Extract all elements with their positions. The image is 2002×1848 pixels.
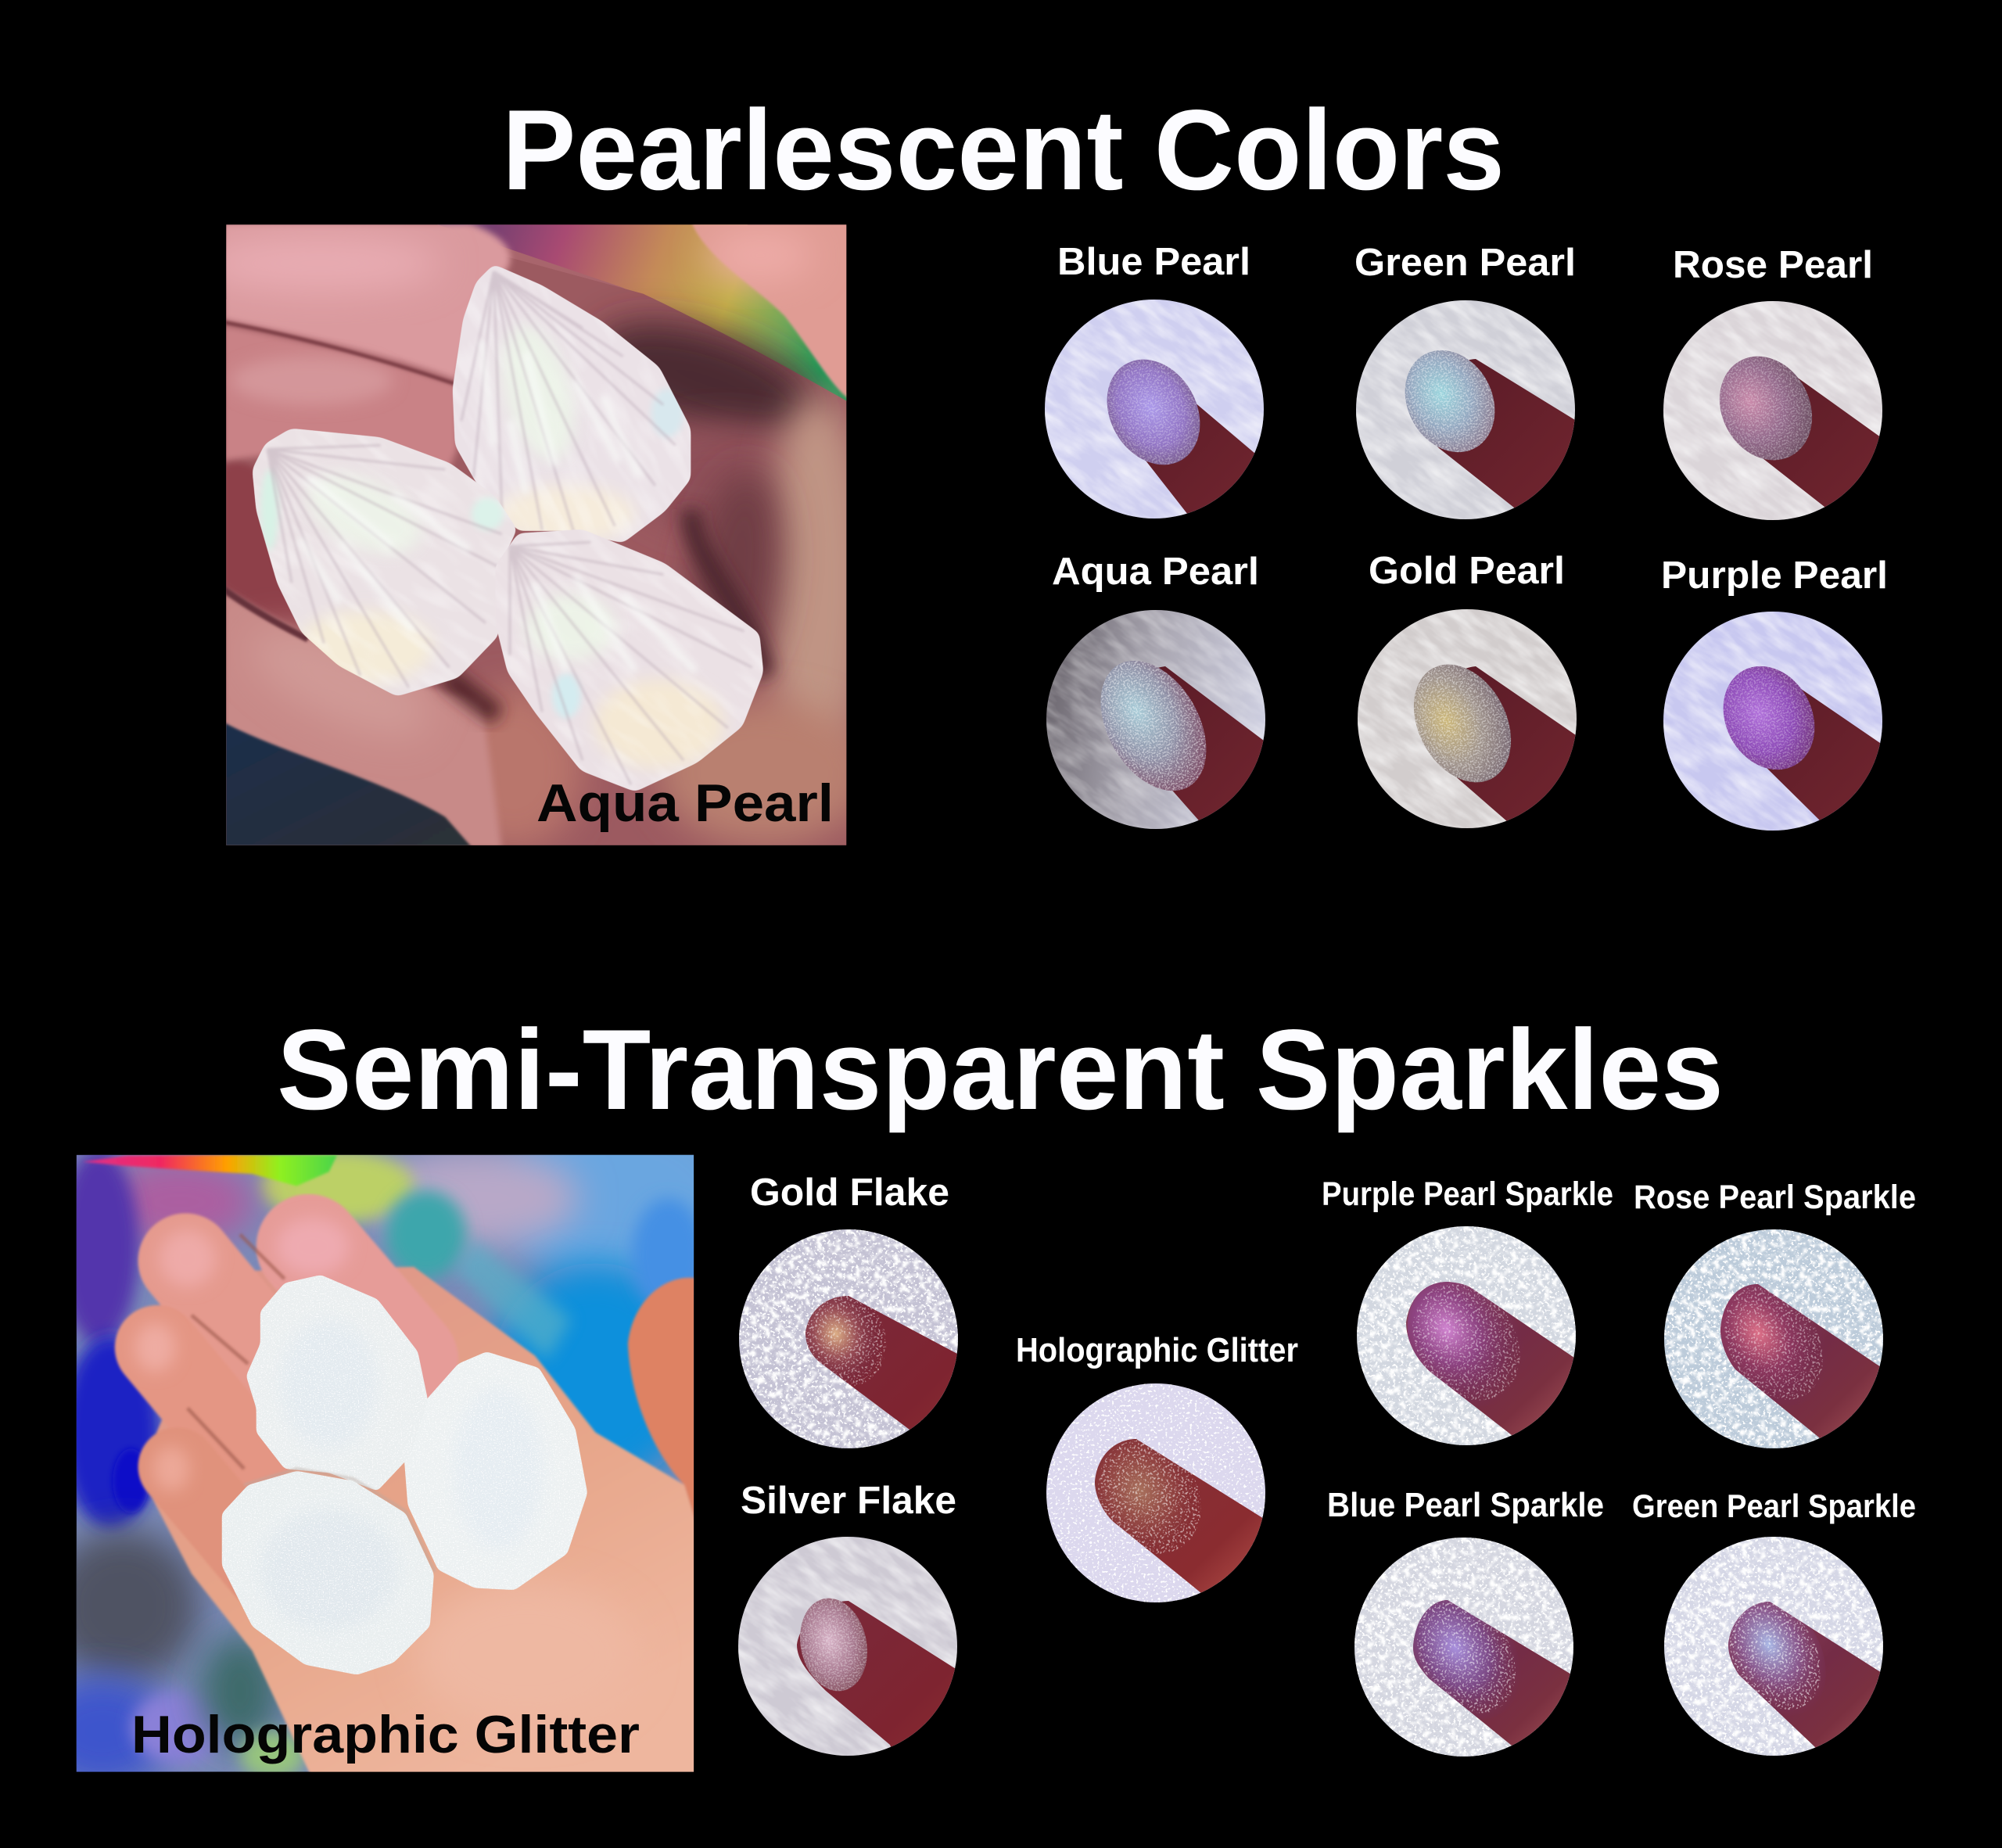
swatch: Blue Pearl	[915, 170, 1394, 648]
shell: top	[375, 203, 777, 620]
glitter shell: right	[393, 1344, 596, 1598]
label: Green Pearl Sparkle: Green Pearl Sparkle	[1632, 1487, 1916, 1524]
label: Silver Flake: Silver Flake	[741, 1480, 956, 1522]
label: Rose Pearl: Rose Pearl	[1673, 244, 1873, 286]
shell: left	[159, 340, 600, 777]
photo label: Aqua Pearl: Aqua Pearl	[536, 773, 834, 833]
swatch: Green Pearl	[1226, 170, 1705, 649]
photo label: Holographic Glitter: Holographic Glitter	[131, 1705, 640, 1764]
label: Rose Pearl Sparkle: Rose Pearl Sparkle	[1634, 1179, 1916, 1216]
swatch: Aqua Pearl	[917, 480, 1395, 959]
swatch: Silver Flake	[608, 1407, 1087, 1848]
photo: Aqua Pearl shells in hand	[226, 224, 846, 845]
shell gap shadow	[244, 1469, 435, 1572]
swatch: Rose Pearl	[1534, 171, 2002, 650]
label: Aqua Pearl: Aqua Pearl	[1052, 551, 1259, 593]
swatch: Blue Pearl Sparkle	[1354, 1538, 1636, 1819]
swatch: Green Pearl Sparkle	[1664, 1537, 1946, 1818]
swatch: Purple Pearl	[1534, 482, 2002, 960]
label: Blue Pearl: Blue Pearl	[1057, 241, 1250, 283]
label: Blue Pearl Sparkle: Blue Pearl Sparkle	[1327, 1486, 1604, 1524]
label: Purple Pearl Sparkle: Purple Pearl Sparkle	[1322, 1175, 1613, 1213]
title: Semi-Transparent Sparkles: Semi-Transparent Sparkles	[277, 1006, 1724, 1133]
shell: right	[407, 436, 846, 874]
photo: Holographic Glitter shells in hand	[34, 1109, 741, 1788]
swatch: Rose Pearl Sparkle	[1664, 1229, 1946, 1511]
glitter shell: top	[240, 1267, 438, 1497]
dark corner	[223, 722, 473, 849]
swatch: Gold Flake	[739, 1229, 1021, 1511]
hand	[135, 1218, 701, 1780]
swatch: Purple Pearl Sparkle	[1357, 1226, 1638, 1508]
swatch: Holographic Glitter	[1046, 1383, 1328, 1665]
swatch: Gold Pearl	[1228, 479, 1706, 958]
label: Green Pearl: Green Pearl	[1354, 242, 1576, 284]
label: Purple Pearl: Purple Pearl	[1661, 554, 1888, 597]
label: Gold Flake: Gold Flake	[750, 1172, 949, 1214]
label: Holographic Glitter: Holographic Glitter	[1016, 1331, 1298, 1369]
title: Pearlescent Colors: Pearlescent Colors	[502, 86, 1505, 214]
glitter shell: bottom	[216, 1465, 442, 1683]
label: Gold Pearl: Gold Pearl	[1369, 550, 1565, 592]
